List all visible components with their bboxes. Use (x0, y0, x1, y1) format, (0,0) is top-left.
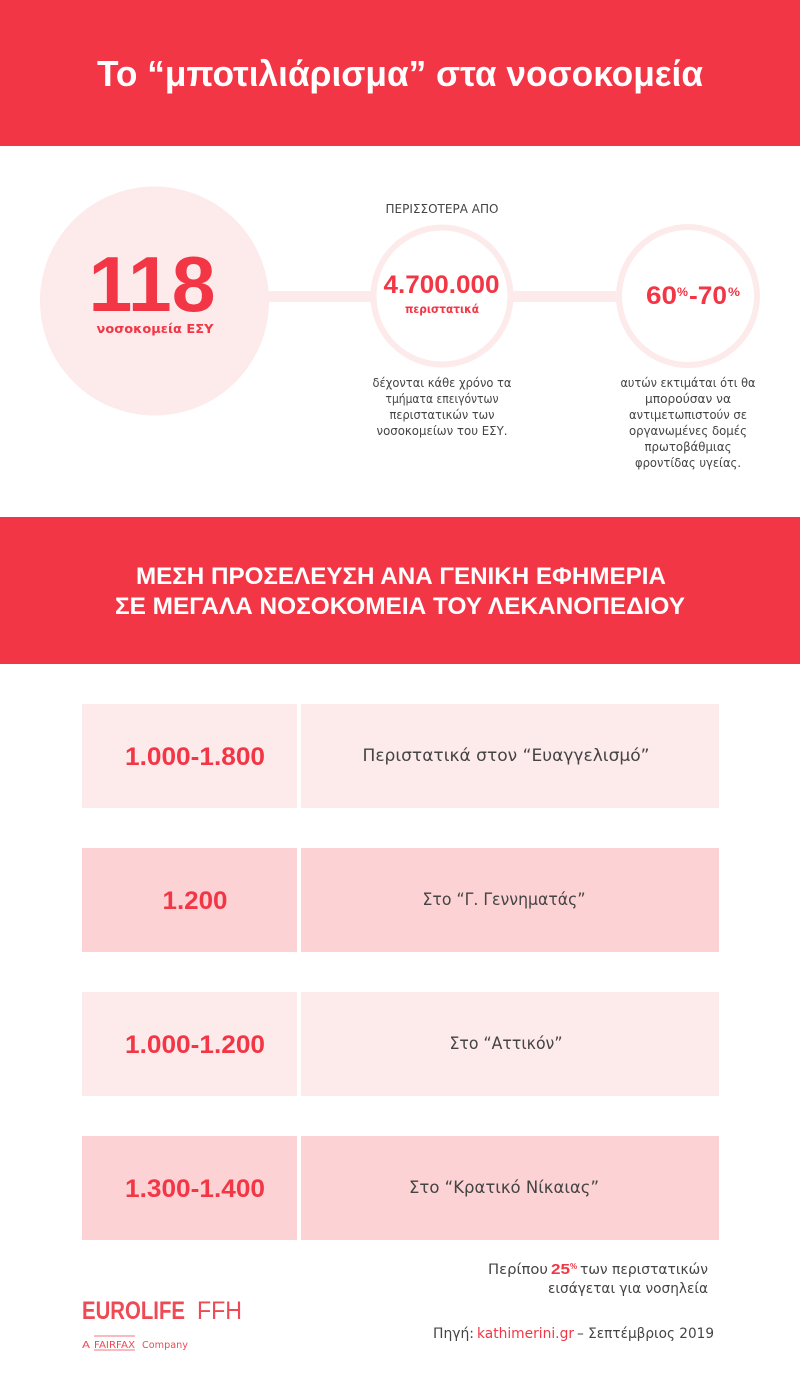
logo: Eurolife FFH (82, 1297, 242, 1351)
row: Nikaia: 1.300-1.400 (125, 1175, 265, 1203)
panel: 60-70 percent: 60 (646, 282, 677, 310)
source line (433, 1326, 714, 1342)
source line: Πηγή: (433, 1326, 474, 1342)
source line: kathimerini.gr (477, 1326, 574, 1342)
panel: 60-70 percent: % (677, 285, 688, 299)
panel: 60-70 percent: αυτών εκτιμάται ότι θα (620, 376, 756, 390)
note: 25 percent admitted: 25 (551, 1261, 570, 1278)
row: Nikaia: Στο “Κρατικό Νίκαιας” (409, 1178, 599, 1198)
note: 25 percent admitted: εισάγεται για νοσηλεία (548, 1281, 708, 1297)
section heading banner: ΣΕ ΜΕΓΑΛΑ ΝΟΣΟΚΟΜΕΙΑ ΤΟΥ ΛΕΚΑΝΟΠΕΔΙΟΥ (115, 593, 685, 620)
panel: 118 hospitals: νοσοκομεία ΕΣΥ (96, 321, 214, 336)
panel: 4.700.000 incidents: 4.700.000 (384, 271, 500, 299)
panel: 60-70 percent: πρωτοβάθμιας (644, 440, 732, 454)
note: 25 percent admitted: % (570, 1262, 577, 1271)
row: Gennimatas (82, 848, 719, 952)
panel: 60-70 percent: μπορούσαν να (645, 392, 731, 406)
note: 25 percent admitted: των περιστατικών (580, 1262, 708, 1278)
row: Evangelismos (82, 704, 719, 808)
panel: 118 hospitals (40, 186, 269, 416)
note: 25 percent admitted (488, 1261, 708, 1297)
panel: 60-70 percent: αντιμετωπιστούν σε (629, 408, 747, 422)
panel: 4.700.000 incidents: δέχονται κάθε χρόνο τα (372, 376, 512, 390)
panel: 4.700.000 incidents: περιστατικά (405, 302, 479, 316)
panel: 4.700.000 incidents: περιστατικών των (390, 408, 495, 422)
panel: 4.700.000 incidents: νοσοκομείων του ΕΣΥ. (376, 424, 508, 438)
row: Gennimatas: 1.200 (162, 887, 228, 915)
logo: Eurolife FFH: A (82, 1340, 90, 1351)
note: 25 percent admitted: Περίπου (488, 1262, 548, 1278)
panel: 60-70 percent: οργανωμένες δομές (629, 424, 747, 438)
panel: 60-70 percent (619, 227, 757, 470)
row: Evangelismos: 1.000-1.800 (125, 743, 265, 771)
row: Attikon: 1.000-1.200 (125, 1031, 265, 1059)
panel: 118 hospitals: 118 (88, 240, 216, 328)
source line: – Σεπτέμβριος 2019 (577, 1326, 714, 1342)
panel: 60-70 percent: -70 (689, 282, 727, 310)
section heading banner: ΜΕΣΗ ΠΡΟΣΕΛΕΥΣΗ ΑΝΑ ΓΕΝΙΚΗ ΕΦΗΜΕΡΙΑ (136, 563, 666, 590)
row: Attikon: Στο “Αττικόν” (450, 1034, 562, 1054)
title banner: Το “μποτιλιάρισμα” στα νοσοκομεία (97, 53, 703, 94)
logo: Eurolife FFH: Company (142, 1340, 188, 1351)
logo: Eurolife FFH: EUROLIFE (82, 1297, 185, 1325)
panel: 4.700.000 incidents: ΠΕΡΙΣΣΟΤΕΡΑ ΑΠΟ (386, 202, 498, 216)
logo: Eurolife FFH: FFH (197, 1297, 242, 1325)
panel: 60-70 percent: φροντίδας υγείας. (635, 456, 741, 470)
section heading banner (0, 517, 800, 664)
row: Attikon (82, 992, 719, 1096)
title banner (0, 0, 800, 146)
panel: 60-70 percent: % (728, 285, 740, 299)
row: Nikaia (82, 1136, 719, 1240)
row: Evangelismos: Περιστατικά στον “Ευαγγελισμό” (362, 746, 650, 766)
panel: 4.700.000 incidents (372, 202, 512, 438)
row: Gennimatas: Στο “Γ. Γεννηματάς” (422, 890, 586, 910)
panel: 4.700.000 incidents: τμήματα επειγόντων (386, 392, 499, 406)
logo: Eurolife FFH: FAIRFAX (94, 1340, 135, 1351)
connector line between circles (260, 291, 630, 302)
